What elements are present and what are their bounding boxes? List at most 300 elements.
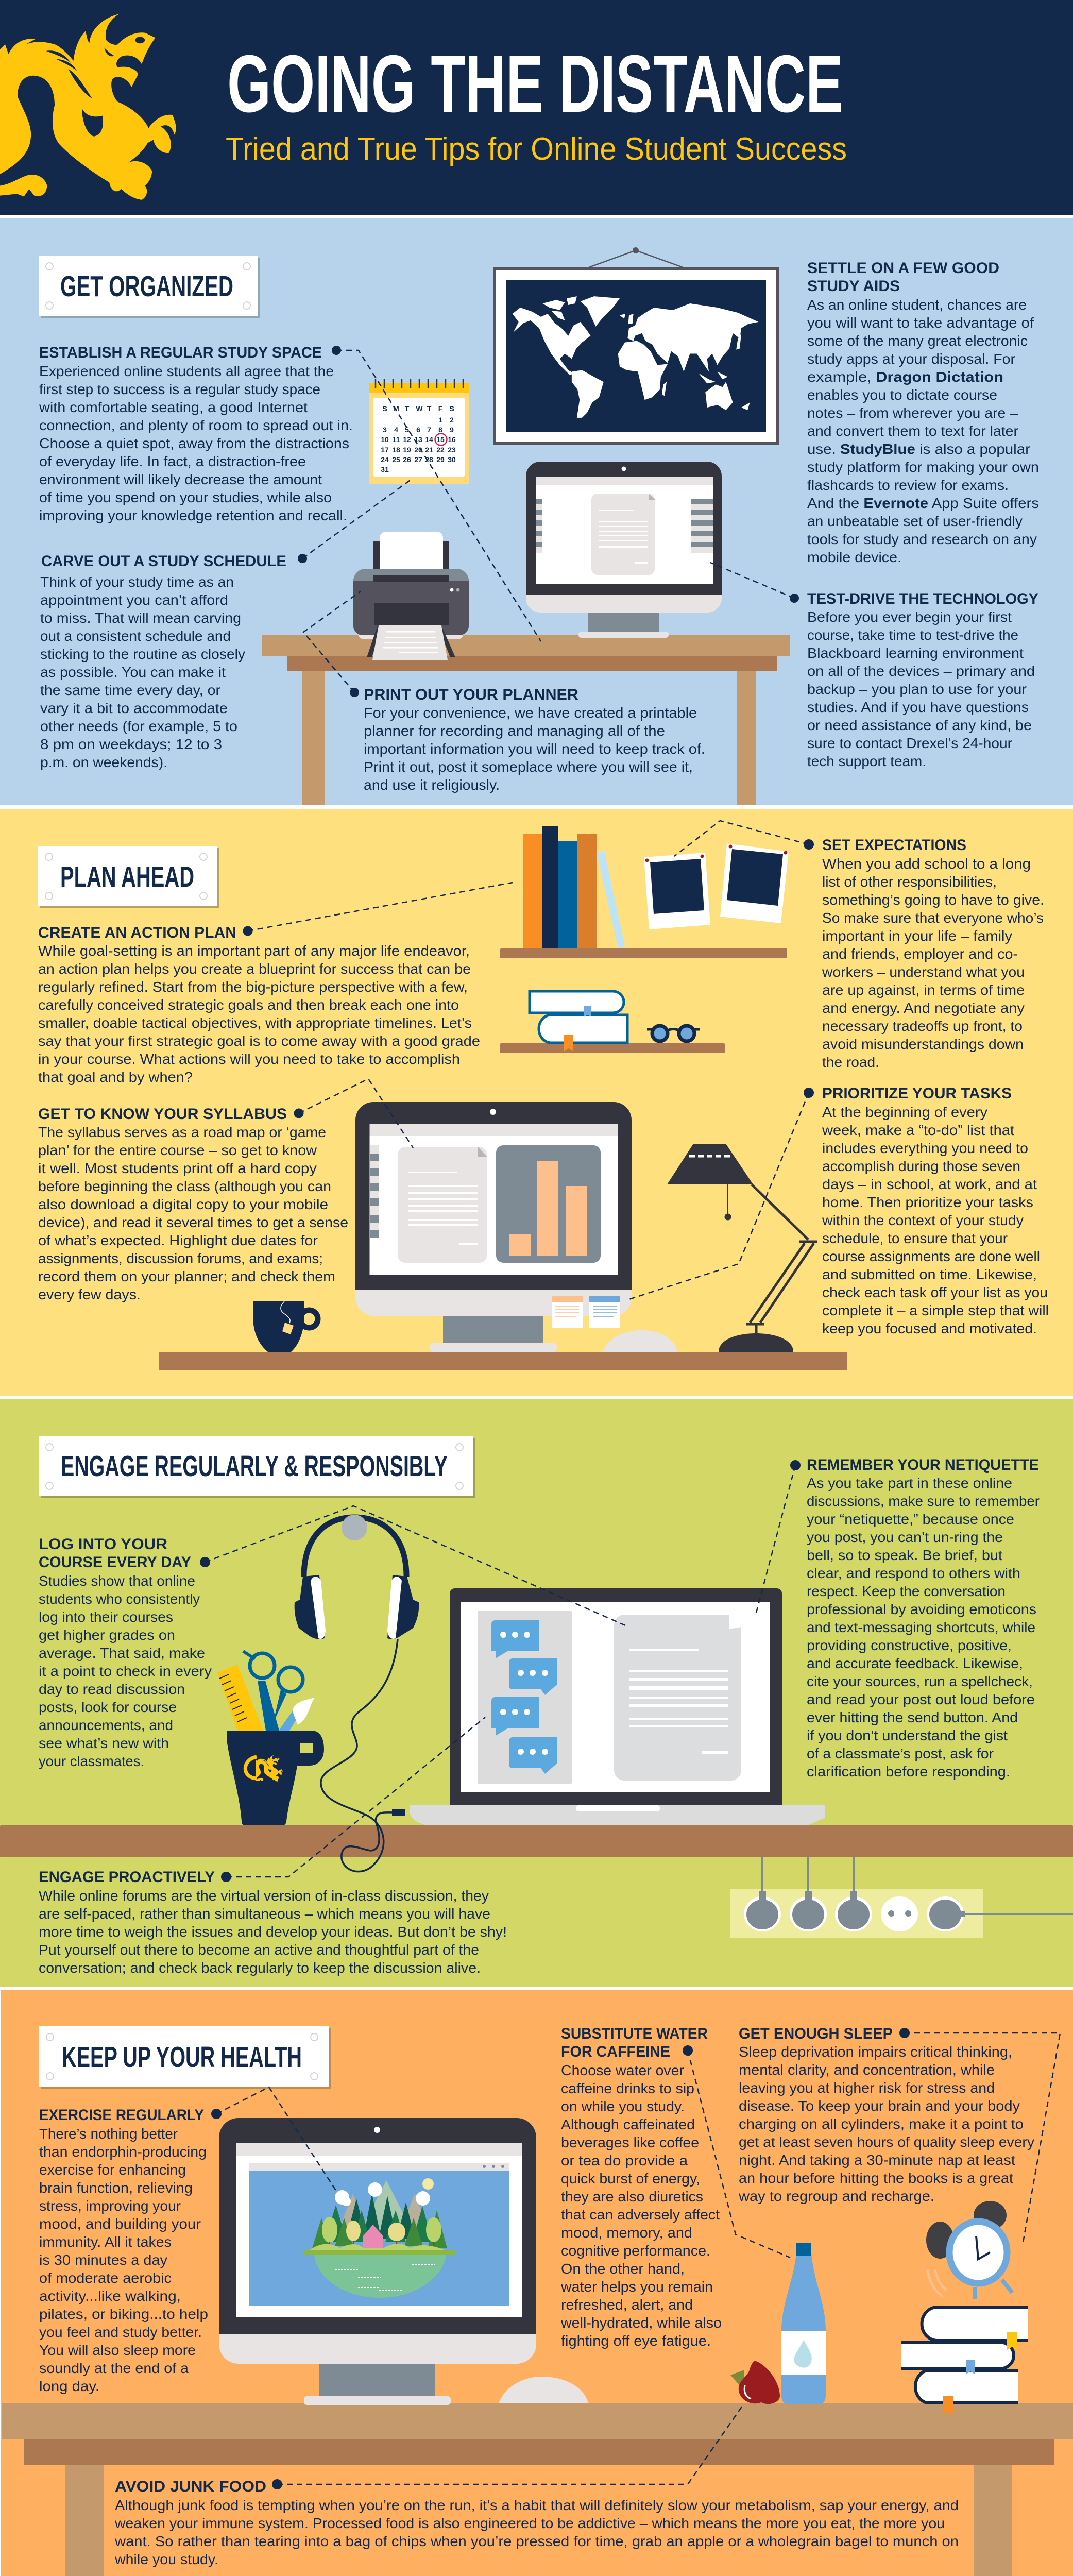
tip: engage proactively: more time to weigh the issues and develop your ideas. But don’t be shy! [39,1924,507,1940]
tip: avoid junk food: weaken your immune system. Processed food is also engineered to be addictive – which means the more you eat, the more you [114,2515,945,2531]
tip: avoid junk food: want. So rather than tearing into a bag of chips when you’re pressed for time, grab an apple or a wholegrain bagel to munch on [114,2533,959,2549]
tip: test-drive the technology: TEST-DRIVE THE TECHNOLOGY [807,590,1038,607]
illustration: desktop monitor [526,462,722,638]
tip: settle on a few good study aids: you will want to take advantage of [807,315,1034,331]
tip: log into your course every day: log into their courses [39,1609,173,1625]
tip: establish a regular study space: first step to success is a regular study space [39,381,320,397]
tip: set expectations: So make sure that everyone who’s [822,910,1044,926]
tip: remember your netiquette [807,1456,1040,1780]
illustration: printer [353,532,469,660]
connector: netiquette [756,1460,801,1615]
tip: test-drive the technology: course, take time to test-drive the [807,627,1018,643]
tip: get to know your syllabus: The syllabus serves as a road map or ‘game [38,1124,326,1140]
tip: remember your netiquette: cite your sources, run a spellcheck, [807,1673,1033,1689]
header banner [0,0,1073,215]
tip: set expectations: workers – understand what you [822,964,1025,980]
tip: exercise regularly: than endorphin-producing [39,2144,207,2160]
tip: log into your course every day: day to read discussion [39,1681,185,1697]
tip: avoid junk food: Although junk food is tempting when you’re on the run, it’s a habit that will definitely slow your metabolism, sap your energy, and [115,2497,959,2513]
tip: carve out a study schedule: CARVE OUT A STUDY SCHEDULE [41,553,286,570]
illustration: stack of books [901,2307,1028,2413]
tip: create an action plan: While goal-setting is an important part of any major life endeavor, [38,943,470,959]
tip: get enough sleep: get at least seven hours of quality sleep every [739,2134,1034,2150]
illustration: wall calendar: 29 [436,455,445,464]
tip: remember your netiquette: providing constructive, positive, [807,1637,1012,1653]
tip: log into your course every day: get higher grades on [39,1627,175,1643]
illustration: wall calendar: 2 [450,416,454,424]
illustration: wall calendar: F [438,404,443,413]
tip: establish a regular study space: of time you spend on your studies, while also [39,489,332,505]
tip: establish a regular study space: with comfortable seating, a good Internet [39,399,308,415]
tip: get to know your syllabus: device), and read it several times to get a sense [38,1214,348,1230]
panel: plan ahead [0,809,1073,1396]
illustration: wall calendar: 15 [436,435,445,444]
tip: print out your planner: Print it out, post it someplace where you will see it, [364,759,693,775]
section heading plaque [38,846,219,908]
tip: print out your planner: important information you will need to keep track of. [364,741,705,757]
tip: set expectations: important in your life – family [822,928,1012,944]
tip: set expectations: and friends, employer and co- [822,946,1018,962]
tip: remember your netiquette: your “netiquette,” because once [807,1511,1014,1527]
tip: get to know your syllabus: of what’s expected. Highlight due dates for [38,1232,318,1248]
tip: create an action plan: say that your first strategic goal is to come away with a good grade [38,1033,480,1049]
tip: carve out a study schedule: 8 pm on weekdays; 12 to 3 [40,736,222,752]
tip: substitute water for caffeine [560,2025,722,2349]
illustration: wall calendar: 6 [416,426,420,434]
tip: create an action plan: an action plan helps you create a blueprint for success that can be [38,961,471,977]
section heading plaque [39,1436,475,1498]
connector: water for caffeine [683,2045,790,2258]
illustration: wall calendar: 21 [425,446,433,454]
panel: engage regularly and responsibly [0,1399,1073,1987]
tip: log into your course every day: it a point to check in every [39,1663,212,1679]
tip: test-drive the technology: tech support team. [807,753,926,769]
tip: print out your planner [364,686,705,793]
tip: settle on a few good study aids: tools for study and research on any [807,531,1037,547]
tip: substitute water for caffeine: cognitive performance. [561,2243,710,2259]
tip: exercise regularly [39,2107,208,2394]
tip: get enough sleep: leaving you at higher risk for stress and [739,2080,995,2096]
tip: prioritize your tasks: check each task off your list as you [822,1284,1048,1300]
icon: Drexel dragon [0,14,176,200]
tip: set expectations: When you add school to a long [822,856,1031,872]
tip: set expectations: SET EXPECTATIONS [822,837,966,854]
tip: get to know your syllabus: assignments, discussion forums, and exams; [38,1250,323,1266]
illustration: wall calendar: 11 [393,435,400,444]
tip: exercise regularly: of moderate aerobic [39,2270,172,2286]
illustration: wall calendar: T [405,404,410,413]
tip: exercise regularly: is 30 minutes a day [39,2252,167,2268]
tip: get enough sleep: night. And taking a 30-minute nap at least [739,2152,1015,2168]
illustration: wall calendar: S [449,404,454,413]
tip: remember your netiquette: and text-messaging shortcuts, while [807,1619,1035,1635]
tip: establish a regular study space: improving your knowledge retention and recall. [39,507,347,523]
illustration: wall calendar: S [382,404,387,413]
tip: prioritize your tasks: keep you focused and motivated. [822,1320,1037,1336]
connector: engage proactively [221,1717,485,1882]
tip: get to know your syllabus: also download a digital copy to your mobile [38,1196,328,1212]
tip: remember your netiquette: and read your post out loud before [807,1691,1035,1707]
tip: avoid junk food: AVOID JUNK FOOD [115,2478,266,2495]
illustration: desk shelf [159,1352,847,1370]
connector: prioritize tasks [627,1088,814,1300]
illustration: desk [0,1825,1073,1857]
tip: get to know your syllabus: GET TO KNOW YOUR SYLLABUS [38,1106,287,1123]
connector: carve out a schedule [298,479,412,563]
tip: settle on a few good study aids: example, Dragon Dictation [807,369,1003,385]
tip: test-drive the technology [807,590,1038,769]
illustration: wall calendar: 1 [438,416,442,424]
illustration: mouse [499,2377,588,2403]
icon: sticky notes [552,1296,620,1328]
section heading plaque [39,256,260,318]
tip: substitute water for caffeine: FOR CAFFEINE [561,2043,670,2060]
tip: test-drive the technology: studies. And if you have questions [807,699,1029,715]
illustration: desktop monitor with island scene [219,2118,536,2405]
tip: prioritize your tasks: accomplish during those seven [822,1158,1020,1174]
illustration: wall calendar: 16 [448,435,456,444]
tip: get to know your syllabus: every few days. [38,1286,141,1302]
tip: exercise regularly: you feel and study better. [39,2324,202,2340]
tip: carve out a study schedule: out a consistent schedule and [40,628,231,644]
tip: carve out a study schedule: other needs (for example, 5 to [40,718,237,734]
tip: exercise regularly: exercise for enhancing [39,2162,186,2178]
tip: establish a regular study space: environment will likely decrease the amount [39,471,322,487]
tip: remember your netiquette: of a classmate’s post, ask for [807,1745,994,1761]
tip: prioritize your tasks: schedule, to ensure that your [822,1230,1008,1246]
illustration: wall calendar: 24 [381,455,389,464]
tip: remember your netiquette: clear, and respond to others with [807,1565,1020,1581]
tip: substitute water for caffeine: well-hydrated, while also [560,2315,722,2331]
tip: print out your planner: PRINT OUT YOUR PLANNER [364,686,578,703]
connector: exercise regularly [211,2087,336,2191]
illustration: water bottle [781,2243,826,2404]
section heading plaque: KEEP UP YOUR HEALTH [62,2041,302,2074]
tip: settle on a few good study aids: flashcards to review for exams. [807,477,1009,493]
tip: substitute water for caffeine: refreshed, alert, and [561,2297,693,2313]
connector: create an action plan [243,883,513,936]
section heading plaque: GET ORGANIZED [60,270,233,303]
tip: create an action plan: that goal and by when? [38,1069,193,1085]
tip: create an action plan: smaller, doable tactical objectives, with appropriate timelines. Let’s [38,1015,472,1031]
illustration: wall calendar: 9 [450,426,454,434]
tip: settle on a few good study aids: STUDY AIDS [807,278,900,295]
tip: set expectations: are up against, in terms of time [822,982,1025,998]
illustration: wall calendar: 19 [403,446,411,454]
tip: set expectations: and energy. And negotiate any [822,1000,1025,1016]
illustration: wall calendar: 12 [403,435,411,444]
illustration: mug with school supplies [217,1651,324,1825]
tip: establish a regular study space: Choose a quiet spot, away from the distractions [39,435,349,451]
illustration: mouse [603,1330,677,1352]
illustration: wall calendar: 20 [414,446,422,454]
tip: prioritize your tasks: within the context of your study [822,1212,1024,1228]
tip: establish a regular study space: Experienced online students all agree that the [39,363,334,379]
tip: exercise regularly: EXERCISE REGULARLY [39,2107,204,2124]
tip: exercise regularly: brain function, relieving [39,2180,193,2196]
illustration: desk lamp [667,1144,817,1352]
tip: remember your netiquette: you post, you can’t un-ring the [807,1529,1003,1545]
tip: get enough sleep: GET ENOUGH SLEEP [739,2025,893,2042]
section heading plaque: ENGAGE REGULARLY & RESPONSIBLY [61,1450,448,1483]
tip: settle on a few good study aids: some of the many great electronic [807,333,1028,349]
section heading plaque: PLAN AHEAD [60,860,194,893]
illustration: power strip [730,1857,1073,1938]
tip: substitute water for caffeine: on while you study. [561,2098,685,2114]
illustration: pinned polaroids [644,843,789,929]
tip: remember your netiquette: respect. Keep the conversation [807,1583,1006,1599]
tip: exercise regularly: mood, and building your [39,2216,201,2232]
tip: print out your planner: planner for recording and managing all of the [364,723,665,739]
illustration: wall calendar [369,379,469,484]
tip: substitute water for caffeine: caffeine drinks to sip [561,2080,694,2096]
tip: remember your netiquette: As you take part in these online [807,1475,1012,1491]
illustration: wall calendar: 31 [381,465,389,473]
tip: settle on a few good study aids: notes – from wherever you are – [807,405,1018,421]
tip: substitute water for caffeine: quick burst of energy, [561,2171,700,2187]
connector: syllabus [294,1079,413,1148]
tip: get enough sleep: mental clarity, and concentration, while [739,2062,995,2078]
tip: create an action plan: regularly refined. Start from the big-picture perspective with a few, [38,979,468,995]
tip: settle on a few good study aids: And the Evernote App Suite offers [807,495,1039,511]
tip: avoid junk food: while you study. [114,2551,218,2567]
tip: get enough sleep: charging on all cylinders, make it a point to [739,2116,1024,2132]
tip: substitute water for caffeine: fighting off eye fatigue. [561,2333,711,2349]
tip: carve out a study schedule: as possible. You can make it [40,664,226,680]
tip: exercise regularly: long day. [39,2378,99,2394]
illustration: wall calendar: 13 [414,435,422,444]
tip: prioritize your tasks: complete it – a simple step that will [822,1302,1049,1318]
illustration: wall calendar: 18 [392,446,400,454]
illustration: wall calendar: 30 [448,455,456,464]
tip: remember your netiquette: bell, so to speak. Be brief, but [807,1547,1002,1563]
illustration: wall calendar: 28 [425,455,433,464]
icon: island scene [303,2178,456,2298]
tip: print out your planner: and use it religiously. [364,777,500,793]
tip: get to know your syllabus: it well. Most students print off a hard copy [38,1160,317,1176]
section heading plaque [39,2026,331,2089]
tip: log into your course every day: students who consistently [39,1591,200,1607]
icon: document on laptop screen [614,1615,741,1781]
tip: settle on a few good study aids: study apps at your disposal. For [807,351,1015,367]
tip: settle on a few good study aids: an unbeatable set of user-friendly [807,513,1023,529]
tip: test-drive the technology: sure to contact Drexel’s 24-hour [807,735,1012,751]
tip: test-drive the technology: Before you ever begin your first [807,609,1012,625]
tip: prioritize your tasks: course assignments are done well [822,1248,1040,1264]
illustration: wall calendar: 22 [436,446,445,454]
tip: set expectations: avoid misunderstandings down [822,1036,1024,1052]
subtitle: Tried and True Tips for Online Student Success [226,131,847,167]
tip: remember your netiquette: professional by avoiding emoticons [807,1601,1036,1617]
connector: print out planner [303,591,361,697]
tip: prioritize your tasks: includes everything you need to [822,1140,1028,1156]
illustration: wall calendar: 10 [381,435,389,444]
tip: create an action plan [38,924,480,1085]
tip: establish a regular study space: ESTABLISH A REGULAR STUDY SPACE [39,344,322,361]
tip: remember your netiquette: ever hitting the send button. And [807,1709,1018,1725]
tip: substitute water for caffeine: mood, memory, and [561,2225,692,2241]
connector: log into course [200,1506,625,1625]
tip: exercise regularly: soundly at the end of a [39,2360,189,2376]
tip: log into your course every day: see what’s new with [39,1735,169,1751]
tip: engage proactively: conversation; and check back regularly to keep the discussion alive. [39,1960,481,1976]
illustration: headphones [295,1515,419,1872]
tip: get to know your syllabus: plan’ for the entire course – so get to know [38,1142,317,1158]
tip: remember your netiquette: and accurate feedback. Likewise, [807,1655,1023,1671]
tip: set expectations: necessary tradeoffs up front, to [822,1018,1023,1034]
connector: test-drive technology [710,563,799,603]
tip: substitute water for caffeine: On the other hand, [561,2261,685,2277]
panel: keep up your health [1,1990,1073,2576]
tip: test-drive the technology: backup – you plan to use for your [807,681,1027,697]
tip: establish a regular study space: connection, and plenty of room to spread out in. [39,417,353,433]
tip: settle on a few good study aids: study platform for making your own [807,459,1039,475]
icon: chat bubbles [491,1620,557,1774]
tip: substitute water for caffeine: that can adversely affect [561,2207,720,2223]
tip: log into your course every day: your classmates. [39,1753,144,1769]
tip: get enough sleep [738,2025,1034,2204]
tip: prioritize your tasks: days – in school, at work, and at [822,1176,1037,1192]
tip: carve out a study schedule: vary it a bit to accommodate [40,700,228,716]
illustration: wall calendar: 23 [448,446,456,454]
tip: settle on a few good study aids: enables you to dictate course [807,387,997,403]
tip: carve out a study schedule: the same time every day, or [40,682,220,698]
tip: remember your netiquette: if you don’t understand the gist [807,1727,1008,1743]
tip: set expectations [822,837,1044,1070]
tip: exercise regularly: stress, improving your [39,2198,181,2214]
tip: log into your course every day: Studies show that online [39,1573,195,1589]
illustration: wall calendar: W [416,404,423,413]
tip: set expectations: list of other responsibilities, [822,874,997,890]
tip: get to know your syllabus: record them on your planner; and check them [38,1268,335,1284]
illustration: wall calendar: 5 [405,426,409,434]
tip: engage proactively [39,1869,507,1976]
tip: establish a regular study space [39,344,353,523]
tip: test-drive the technology: or need assistance of any kind, be [807,717,1032,733]
illustration: framed world map [495,247,778,443]
tip: carve out a study schedule: Think of your study time as an [40,574,234,590]
tip: prioritize your tasks: At the beginning of every [822,1104,987,1120]
tip: log into your course every day: average. That said, make [39,1645,205,1661]
tip: test-drive the technology: on all of the devices – primary and [807,663,1035,679]
tip: create an action plan: CREATE AN ACTION PLAN [38,924,236,941]
tip: get enough sleep: way to regroup and recharge. [738,2188,934,2204]
illustration: wall calendar: M [393,404,399,413]
tip: engage proactively: Put yourself out there to become an active and thoughtful part of the [39,1942,479,1958]
tip: establish a regular study space: of everyday life. In fact, a distraction-free [39,453,306,469]
illustration: apple [730,2361,780,2404]
tip: remember your netiquette: REMEMBER YOUR NETIQUETTE [807,1456,1039,1473]
tip: substitute water for caffeine: Although caffeinated [561,2116,695,2132]
tip: substitute water for caffeine: SUBSTITUTE WATER [561,2025,708,2042]
illustration: tea mug [253,1301,318,1352]
tip: settle on a few good study aids: use. StudyBlue is also a popular [807,441,1030,457]
connector: enough sleep [899,2028,1060,2245]
tip: get enough sleep: an hour before hitting the books is a great [739,2170,1013,2186]
illustration: wall calendar: 8 [438,426,442,434]
illustration: wall calendar: 25 [392,455,400,464]
connector: junk food [272,2406,742,2489]
tip: test-drive the technology: Blackboard learning environment [807,645,1024,661]
connector: set expectations [674,821,814,856]
tip: exercise regularly: There’s nothing better [39,2126,178,2142]
tip: carve out a study schedule: to miss. That will mean carving [40,610,241,626]
illustration: desk [262,635,790,805]
tip: carve out a study schedule [40,553,286,770]
tip: substitute water for caffeine: water helps you remain [560,2279,713,2295]
tip: carve out a study schedule: sticking to the routine as closely [40,646,245,662]
tip: settle on a few good study aids: mobile device. [807,549,901,565]
illustration: lower shelf with books and glasses [500,991,725,1053]
tip: log into your course every day: posts, look for course [39,1699,177,1715]
tip: remember your netiquette: discussions, make sure to remember [807,1493,1040,1509]
tip: set expectations: something’s going to have to give. [822,892,1044,908]
tip: carve out a study schedule: p.m. on weekends). [40,754,167,770]
tip: settle on a few good study aids: SETTLE ON A FEW GOOD [807,260,999,277]
tip: exercise regularly: immunity. All it takes [39,2234,172,2250]
tip: set expectations: the road. [822,1054,879,1070]
illustration: alarm clock [926,2201,1012,2299]
tip: substitute water for caffeine: or tea do provide a [561,2153,688,2168]
tip: exercise regularly: You will also sleep more [39,2342,196,2358]
connector: establish a study space [332,346,541,641]
tip: get to know your syllabus: before beginning the class (although you can [38,1178,331,1194]
tip: prioritize your tasks: PRIORITIZE YOUR TASKS [822,1085,1012,1102]
tip: get enough sleep: disease. To keep your brain and your body [739,2098,1020,2114]
tip: settle on a few good study aids: As an online student, chances are [807,297,1027,313]
icon: small dragon on mug [245,1755,283,1782]
tip: engage proactively: ENGAGE PROACTIVELY [39,1869,215,1886]
tip: prioritize your tasks: week, make a “to-do” list that [822,1122,1014,1138]
tip: carve out a study schedule: appointment you can’t afford [40,592,228,608]
tip: substitute water for caffeine: Choose water over [561,2062,684,2078]
illustration: wall calendar: 26 [403,455,411,464]
illustration: upper shelf with books [500,826,787,958]
tip: get to know your syllabus [38,1106,348,1302]
tip: remember your netiquette: clarification before responding. [807,1764,1010,1780]
tip: prioritize your tasks [822,1085,1049,1336]
illustration: wall calendar: 14 [425,435,433,444]
tip: settle on a few good study aids [807,260,1039,565]
illustration: wall calendar: 3 [383,426,387,434]
illustration: wall calendar: 27 [414,455,422,464]
tip: log into your course every day: LOG INTO YOUR [39,1536,167,1553]
tip: create an action plan: in your course. What actions will you need to take to accomplish [38,1051,460,1067]
tip: engage proactively: While online forums are the virtual version of in-class discussion, they [39,1888,489,1904]
tip: log into your course every day: announcements, and [39,1717,173,1733]
illustration: wall calendar: 4 [394,426,398,434]
tip: avoid junk food [114,2478,959,2567]
tip: prioritize your tasks: and submitted on time. Likewise, [822,1266,1037,1282]
panel: get organized [0,218,1073,805]
tip: substitute water for caffeine: they are also diuretics [561,2189,703,2205]
illustration: wall calendar: T [427,404,432,413]
tip: engage proactively: are self-paced, rather than simultaneous – which means you will have [39,1906,490,1922]
tip: substitute water for caffeine: beverages like coffee [561,2134,699,2150]
tip: exercise regularly: activity...like walking, [39,2288,181,2304]
illustration: desktop monitor with chart [355,1102,632,1352]
illustration: laptop with chat [410,1588,825,1825]
tip: log into your course every day: COURSE EVERY DAY [39,1554,191,1571]
illustration: desk [2,2403,1073,2576]
tip: log into your course every day [39,1536,212,1769]
illustration: wall calendar: 17 [381,446,389,454]
illustration: wall calendar: 7 [427,426,431,434]
tip: prioritize your tasks: home. Then prioritize your tasks [822,1194,1033,1210]
tip: exercise regularly: pilates, or biking...to help [39,2306,208,2322]
tip: get enough sleep: Sleep deprivation impairs critical thinking, [739,2044,1012,2060]
tip: settle on a few good study aids: and convert them to text for later [807,423,1018,439]
